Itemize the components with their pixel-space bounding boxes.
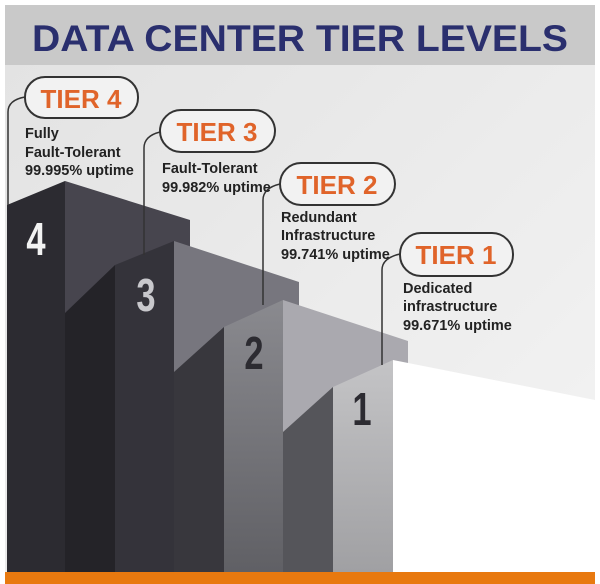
tier 4 label: 99.995% uptime [25,163,134,179]
tier 2 label: Infrastructure [281,228,375,244]
tier 2 label [263,163,395,305]
tier 4 label: Fault-Tolerant [25,145,121,161]
bar 2: 2 [244,327,264,379]
bar 4 [7,181,190,584]
tier 4 label: Fully [25,126,59,142]
bar 1 [333,360,595,584]
bar chart: tier columns [7,181,595,584]
tier 3 label: 99.982% uptime [162,180,271,196]
title: DATA CENTER TIER LEVELS [32,18,568,59]
bar 1: 1 [352,383,372,435]
tier 2 label: TIER 2 [297,170,377,200]
tier 3 label: TIER 3 [177,117,257,147]
orange footer bar [5,572,595,584]
tier 3 label [144,110,275,255]
tier 2 label: 99.741% uptime [281,247,390,263]
tier 2 label: Redundant [281,210,357,226]
tier 1 label: Dedicated [403,281,472,297]
tier 1 label: TIER 1 [416,240,496,270]
header band [5,5,595,65]
tier 3 label: Fault-Tolerant [162,161,258,177]
bar 4: 4 [26,213,46,265]
tier 1 label: infrastructure [403,299,497,315]
tier 4 label: TIER 4 [41,84,122,114]
bar 2 [224,300,408,584]
tier 4 label [8,77,138,205]
bar 3 [115,241,299,584]
tier 1 label [382,233,513,365]
bar 3: 3 [136,269,156,321]
tier 1 label: 99.671% uptime [403,318,512,334]
